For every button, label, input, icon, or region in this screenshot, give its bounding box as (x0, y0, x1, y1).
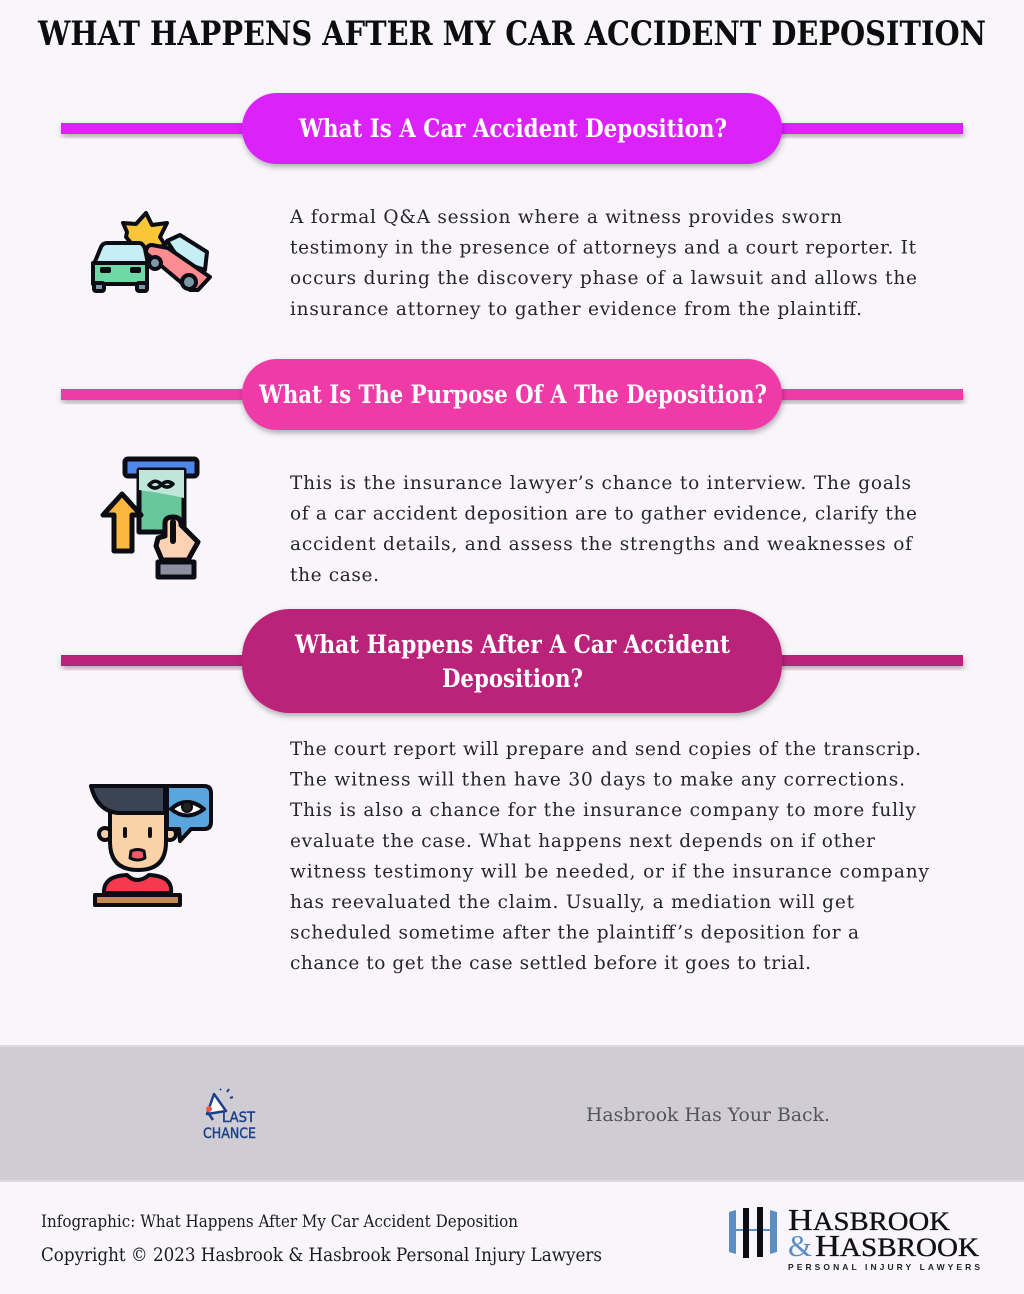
text: what happens after: scheduled sometime after the plaintiff’s deposition for a (290, 923, 859, 944)
text: what happens after: has reevaluated the claim. Usually, a mediation will get (290, 892, 855, 913)
text: what happens after: This is also a chance for the insurance company to more fully (290, 800, 917, 821)
text: definition: testimony in the presence of attorneys and a court reporter. It (290, 238, 917, 259)
text: infographic credit: Infographic: What Happens After My Car Accident Deposition (41, 1212, 518, 1231)
panel: grey band (0, 1045, 1024, 1182)
panel: purpose heading (61, 359, 963, 430)
icon: car crash (93, 213, 210, 291)
text: purpose: accident details, and assess the strengths and weaknesses of (290, 534, 913, 555)
logo: last chance (203, 1089, 256, 1142)
logo: last chance: LAST (222, 1110, 255, 1126)
text: purpose: the case. (290, 565, 379, 586)
logo: Hasbrook and Hasbrook: HASBROOK (788, 1202, 950, 1237)
text: definition (289, 207, 917, 320)
logo: Hasbrook and Hasbrook: & (788, 1228, 812, 1263)
logo: Hasbrook and Hasbrook: HASBROOK (815, 1228, 979, 1263)
text: what happens after: The witness will then have 30 days to make any corrections. (290, 770, 905, 791)
text: purpose: of a car accident deposition are to gather evidence, clarify the (290, 504, 917, 525)
text: what happens after: witness testimony will be needed, or if the insurance company (290, 861, 930, 882)
text: what happens after: evaluate the case. What happens next depends on if other (290, 831, 875, 852)
text: definition: insurance attorney to gather evidence from the plaintiff. (290, 299, 862, 320)
panel: after deposition heading: What Happens After A Car Accident (294, 630, 730, 659)
logo: last chance: CHANCE (203, 1126, 256, 1142)
icon: money and hand (103, 459, 198, 577)
text: copyright: Copyright © 2023 Hasbrook & Hasbrook Personal Injury Lawyers (41, 1245, 602, 1266)
text: definition: occurs during the discovery phase of a lawsuit and allows the (290, 268, 917, 289)
text: slogan: Hasbrook Has Your Back. (586, 1104, 830, 1126)
logo: Hasbrook and Hasbrook: PERSONAL INJURY LAWYERS (788, 1262, 980, 1272)
panel: what is a deposition heading: What Is A Car Accident Deposition? (298, 114, 727, 143)
panel: what is a deposition heading (61, 93, 963, 164)
text: what happens after: chance to get the case settled before it goes to trial. (290, 953, 811, 974)
text: purpose (290, 473, 917, 586)
panel: after deposition heading (61, 609, 963, 713)
text: purpose: This is the insurance lawyer’s chance to interview. The goals (290, 473, 911, 494)
icon: person with speech bubble (91, 786, 211, 905)
text: what happens after (290, 739, 930, 974)
panel: purpose heading: What Is The Purpose Of A The Deposition? (258, 380, 767, 409)
text: definition: A formal Q&A session where a witness provides sworn (289, 207, 842, 228)
panel: after deposition heading: Deposition? (442, 664, 583, 693)
logo: Hasbrook and Hasbrook (729, 1202, 980, 1272)
text: what happens after: The court report will prepare and send copies of the transcrip. (290, 739, 921, 760)
